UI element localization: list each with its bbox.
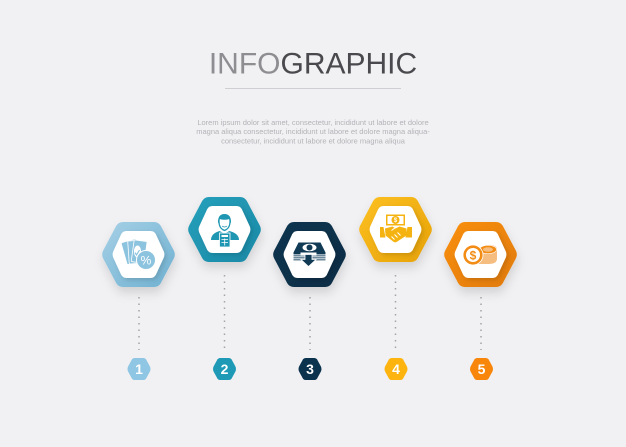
title underline [225, 88, 401, 89]
number badge 5 [470, 358, 493, 380]
number badge 3: 3 [306, 361, 314, 377]
step 3 hexagon [273, 222, 346, 287]
number badge 2 [213, 358, 236, 380]
title: INFOGRAPHIC [209, 48, 417, 80]
description text [196, 118, 430, 146]
connector dots [139, 275, 481, 350]
number badge 3 [298, 358, 322, 380]
number badge 5: 5 [478, 361, 486, 377]
icon: accountant with calculator [211, 214, 239, 247]
step 2 hexagon [188, 197, 261, 262]
step 4 hexagon [359, 197, 432, 262]
description text: consectetur, incididunt ut labore et dolore magna aliqua [221, 136, 406, 146]
description text: magna aliqua consectetur, incididunt ut labore et dolore magna aliqua- [196, 127, 430, 136]
number badge 1: 1 [135, 361, 143, 377]
step 1 hexagon [102, 222, 175, 287]
icon: coins: $ [470, 248, 477, 262]
icon: banknotes with percent: % [141, 253, 152, 267]
step 5 hexagon [444, 222, 517, 287]
description text: Lorem ipsum dolor sit amet, consectetur, incididunt ut labore et dolore [197, 118, 429, 127]
icon: cash stack with down arrow [294, 242, 326, 266]
number badge 2: 2 [221, 361, 229, 377]
number badge 4: 4 [392, 361, 400, 377]
number badge 4 [384, 358, 408, 380]
number badge 1 [128, 358, 150, 380]
icon: banknote over handshake: $ [394, 218, 398, 224]
